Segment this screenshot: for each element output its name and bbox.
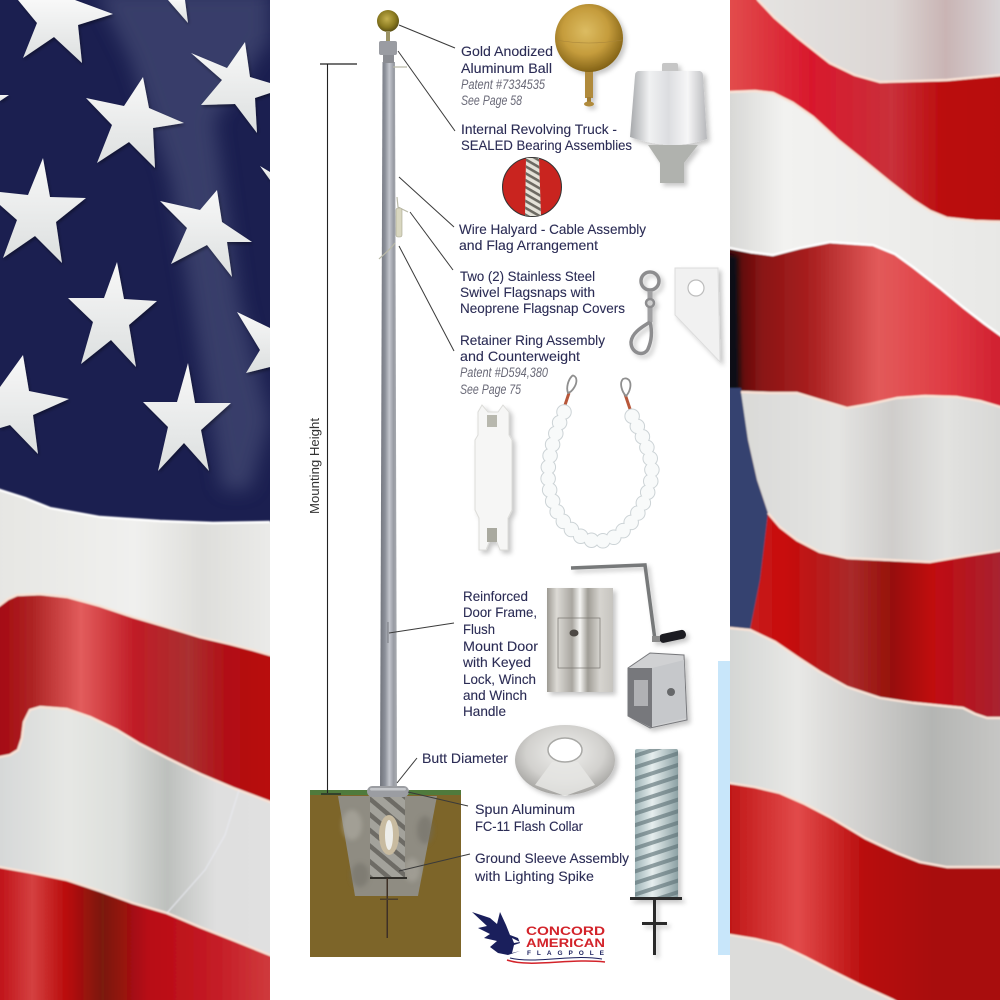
canton light folds	[95, 0, 270, 490]
label: retainer ring: Retainer Ring Assembly	[460, 332, 605, 348]
label: door frame: Handle	[463, 703, 506, 719]
label: flagsnaps: Two (2) Stainless Steel	[460, 268, 595, 284]
label: gold ball: Aluminum Ball	[461, 60, 552, 76]
label: retainer ring	[460, 332, 605, 397]
product: retainer bead chain	[548, 376, 652, 541]
label: flash collar	[475, 801, 583, 834]
label: gold ball: See Page 58	[461, 93, 522, 108]
product: counterweight	[475, 405, 512, 550]
halyard and snaps	[379, 67, 408, 259]
logo: Concord American Flagpole	[472, 912, 605, 963]
label: wire halyard: and Flag Arrangement	[459, 237, 598, 253]
center white panel	[270, 0, 730, 1000]
logo: Concord American Flagpole: AMERICAN	[526, 938, 605, 950]
label: ground sleeve: Ground Sleeve Assembly	[475, 850, 629, 866]
label: door frame: Flush	[463, 621, 495, 637]
label: wire halyard: Wire Halyard - Cable Assembly	[459, 221, 646, 237]
right flag background: stripes	[720, 0, 1000, 1000]
label: truck	[461, 121, 632, 153]
label: ground sleeve: with Lighting Spike	[474, 868, 594, 884]
logo: Concord American Flagpole: FLAGPOLE	[527, 950, 605, 957]
flagpole	[367, 10, 409, 797]
label: door frame: Mount Door	[463, 638, 538, 654]
leader lines	[389, 25, 470, 871]
label: truck: Internal Revolving Truck -	[461, 121, 617, 137]
product: door frame	[547, 588, 613, 692]
label: flagsnaps: Swivel Flagsnaps with	[460, 284, 595, 300]
logo eagle	[472, 912, 520, 955]
label: door frame	[462, 588, 538, 719]
label: flagsnaps	[460, 268, 625, 316]
product: winch	[628, 653, 687, 728]
ground cross-section	[310, 790, 461, 957]
product: winch handle	[571, 565, 687, 644]
label: ground sleeve	[474, 850, 629, 884]
label: flash collar: FC-11 Flash Collar	[475, 818, 583, 834]
product: revolving truck	[630, 63, 707, 183]
pale blue side strip	[718, 661, 730, 955]
product: wire cable detail	[502, 158, 562, 216]
dark fold beside red stripe	[725, 254, 740, 392]
flash collar on pole	[367, 786, 409, 797]
label: truck: SEALED Bearing Assemblies	[461, 137, 632, 153]
stripes	[0, 487, 280, 1000]
label: door frame: and Winch	[463, 687, 527, 703]
gold ball finial	[377, 10, 399, 32]
label: gold ball	[461, 43, 553, 108]
logo swoosh	[507, 960, 605, 963]
label: flash collar: Spun Aluminum	[475, 801, 575, 817]
label: wire halyard	[459, 221, 646, 253]
ground sleeve	[370, 797, 405, 878]
label: gold ball: Gold Anodized	[461, 43, 553, 59]
left flag background: stars and stripes	[0, 0, 280, 1000]
navy canton fold on right	[720, 388, 768, 630]
lightning spike	[386, 878, 388, 938]
label: retainer ring: Patent #D594,380	[460, 365, 548, 380]
truck on pole	[379, 41, 397, 55]
label: retainer ring: See Page 75	[460, 382, 521, 397]
label: door frame: Lock, Winch	[463, 671, 536, 687]
mounting height label: Mounting Height	[307, 418, 322, 514]
product: flash collar	[515, 725, 615, 796]
product: ground sleeve	[630, 749, 682, 955]
product: gold ball	[555, 4, 623, 106]
label: door frame: with Keyed	[462, 654, 531, 670]
product: neoprene cover	[675, 268, 720, 362]
sleeve slot	[379, 815, 399, 855]
label: door frame: Door Frame,	[463, 604, 537, 620]
pole door	[387, 622, 389, 643]
stars	[0, 0, 270, 471]
product: swivel flagsnap	[631, 272, 659, 353]
concrete footing	[338, 796, 437, 896]
label: retainer ring: and Counterweight	[460, 348, 580, 364]
label: flagsnaps: Neoprene Flagsnap Covers	[460, 300, 625, 316]
logo wordmark: CONCORD	[526, 926, 605, 938]
label: door frame: Reinforced	[463, 588, 528, 604]
label: butt diameter: Butt Diameter	[422, 750, 508, 766]
label: gold ball: Patent #7334535	[461, 77, 545, 92]
